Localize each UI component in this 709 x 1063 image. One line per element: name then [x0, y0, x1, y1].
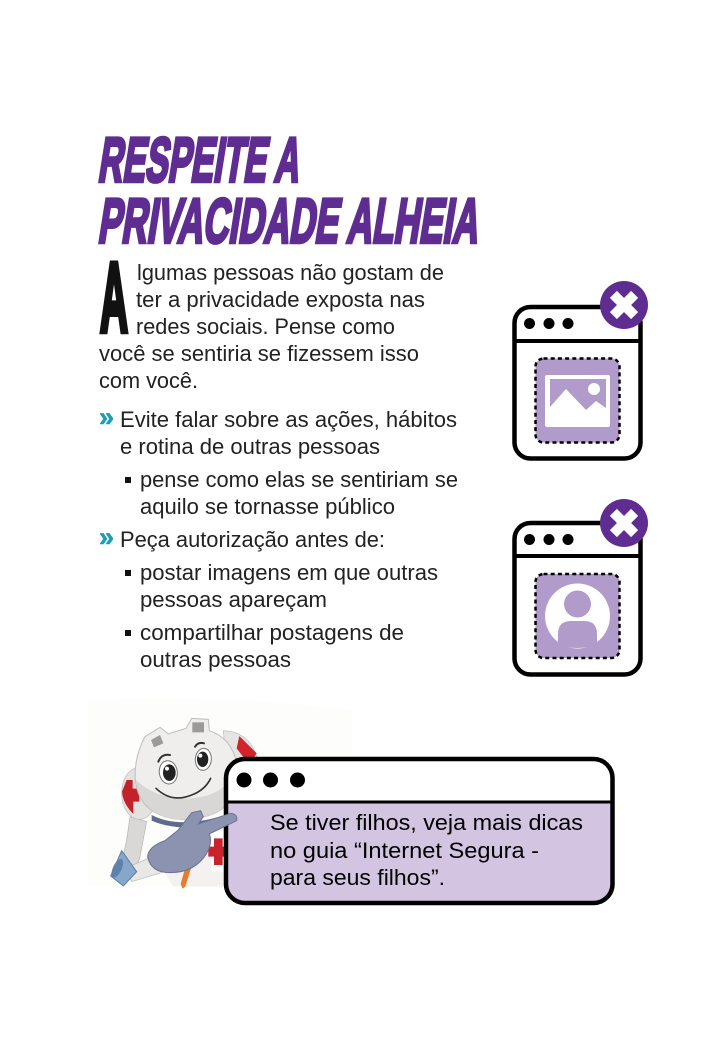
callout text: Se tiver filhos, veja mais dicas — [270, 810, 583, 835]
sub-tip: sharing posts: outras pessoas — [140, 647, 291, 672]
intro paragraph: ter a privacidade exposta nas — [136, 287, 425, 312]
intro paragraph: com você. — [99, 368, 198, 393]
sub-tip: sharing posts — [125, 620, 404, 672]
tip: ask permission: Peça autorização antes de: — [120, 527, 385, 552]
callout text — [270, 810, 583, 890]
tip: avoid talking about others: e rotina de outras pessoas — [120, 434, 380, 459]
sub-tip: posting images — [125, 560, 438, 612]
intro paragraph: você se sentiria se fizessem isso — [99, 341, 419, 366]
intro paragraph: lgumas pessoas não gostam de — [137, 260, 444, 285]
sub-tip: think how they would feel: aquilo se tornasse público — [140, 494, 395, 519]
callout window — [226, 759, 612, 903]
mascot: robot body and head — [87, 698, 353, 889]
sub-tip: sharing posts: compartilhar postagens de — [140, 620, 404, 645]
tip: avoid talking about others: Evite falar sobre as ações, hábitos — [120, 407, 457, 432]
tip: ask permission: » — [99, 522, 114, 552]
title — [95, 126, 486, 256]
sub-tip: think how they would feel: pense como elas se sentiriam se — [140, 467, 458, 492]
sub-tip: posting images: postar imagens em que outras — [140, 560, 438, 585]
intro paragraph — [99, 260, 444, 393]
title: RESPEITE A — [95, 126, 307, 195]
mascot: pointing glove overlapping the callout — [148, 811, 237, 873]
sub-tip: posting images: pessoas apareçam — [140, 587, 327, 612]
callout: tip for parents — [226, 759, 612, 903]
sub-tip: think how they would feel — [125, 467, 458, 519]
tip: avoid talking about others — [99, 402, 457, 459]
text: A — [100, 242, 128, 352]
icon: blocked image window — [514, 281, 648, 458]
icon: blocked profile window — [514, 499, 648, 674]
tip: avoid talking about others: » — [99, 402, 114, 432]
intro paragraph: redes sociais. Pense como — [136, 314, 395, 339]
callout text: no guia “Internet Segura - — [270, 838, 539, 863]
list of tips — [99, 402, 458, 672]
callout text: para seus filhos”. — [270, 865, 445, 890]
